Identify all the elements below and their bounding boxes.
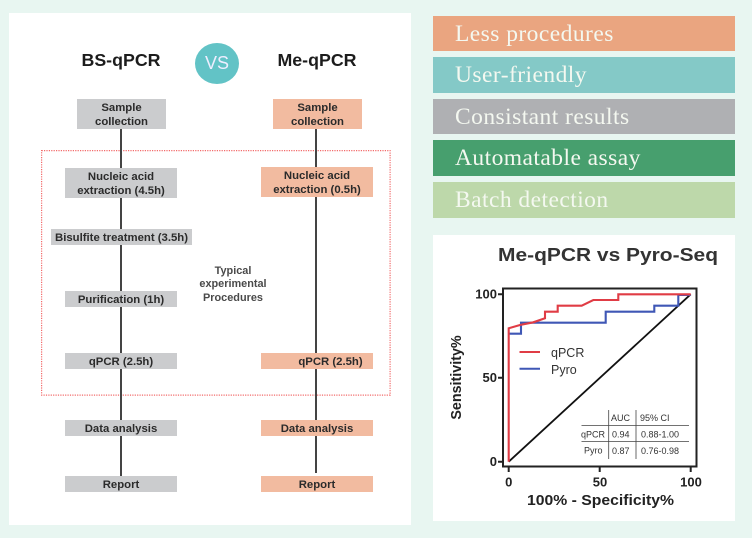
x axis tick labels bbox=[505, 474, 702, 490]
label: typical experimental procedures: experimental bbox=[199, 278, 267, 290]
benefit bar: user-friendly: User-friendly bbox=[455, 62, 587, 88]
AUC table: 95% CI bbox=[640, 413, 670, 423]
step: BS nucleic acid extraction: Nucleic acid bbox=[88, 171, 154, 183]
step: Me nucleic acid extraction: extraction (0.5h) bbox=[273, 184, 361, 196]
diagonal reference line bbox=[509, 294, 691, 462]
step: Me data analysis: Data analysis bbox=[281, 423, 353, 435]
Pyro curve bbox=[509, 295, 691, 334]
AUC table: 0.88-1.00 bbox=[641, 430, 679, 440]
panel: ROC chart bbox=[433, 235, 735, 521]
legend: qPCR bbox=[551, 346, 584, 360]
step: Me sample collection: Sample bbox=[297, 102, 338, 114]
step: Me report: Report bbox=[299, 479, 335, 491]
dotted frame: typical experimental procedures bbox=[41, 150, 391, 396]
step: Me nucleic acid extraction: Nucleic acid bbox=[284, 170, 350, 182]
step: BS nucleic acid extraction: extraction (4.5h) bbox=[77, 184, 165, 196]
icon: VS circle: VS bbox=[205, 53, 229, 73]
step: Me sample collection: collection bbox=[291, 116, 344, 128]
connector: BS-qPCR line bbox=[120, 128, 122, 476]
step: BS sample collection: collection bbox=[95, 116, 148, 128]
step: BS nucleic acid extraction bbox=[65, 168, 177, 198]
heading: BS-qPCR: BS-qPCR bbox=[81, 50, 161, 70]
benefit bar: consistant results bbox=[433, 98, 735, 134]
AUC table: 0.76-0.98 bbox=[641, 446, 679, 456]
AUC table bbox=[581, 410, 689, 459]
step: BS sample collection bbox=[77, 99, 166, 129]
x axis tick labels: 50 bbox=[593, 474, 607, 490]
y axis tick labels: 0 bbox=[490, 454, 497, 469]
step: BS report bbox=[65, 476, 177, 492]
step: Me qPCR: qPCR (2.5h) bbox=[298, 356, 363, 368]
AUC table: qPCR bbox=[581, 430, 606, 440]
icon: VS circle bbox=[195, 43, 239, 84]
qPCR curve bbox=[509, 294, 691, 462]
step: Me report bbox=[261, 476, 373, 492]
AUC table: AUC bbox=[611, 413, 631, 423]
AUC table: 0.94 bbox=[612, 430, 630, 440]
benefit bar: batch detection bbox=[433, 182, 735, 218]
label: typical experimental procedures bbox=[199, 264, 267, 304]
y axis tick labels: 50 bbox=[483, 370, 497, 385]
legend: Pyro bbox=[551, 363, 577, 377]
step: Me qPCR bbox=[261, 353, 373, 369]
heading: Me-qPCR: Me-qPCR bbox=[277, 50, 357, 70]
step: Me nucleic acid extraction bbox=[261, 167, 373, 197]
y axis tick labels bbox=[475, 286, 497, 469]
step: bisulfite treatment: Bisulfite treatment (3.5h) bbox=[55, 232, 188, 244]
benefit bar: automatable assay: Automatable assay bbox=[455, 145, 641, 171]
benefit bar: batch detection: Batch detection bbox=[455, 187, 609, 213]
chart title: Me-qPCR vs Pyro-Seq bbox=[498, 244, 718, 265]
step: BS data analysis: Data analysis bbox=[85, 423, 157, 435]
benefit bar: less procedures bbox=[433, 16, 735, 51]
plot frame and ticks bbox=[498, 288, 696, 472]
AUC table: Pyro bbox=[584, 446, 603, 456]
panel: workflow comparison bbox=[9, 13, 411, 525]
legend bbox=[520, 346, 584, 377]
step: purification: Purification (1h) bbox=[78, 294, 164, 306]
step: purification bbox=[65, 291, 177, 307]
step: BS qPCR: qPCR (2.5h) bbox=[89, 356, 153, 368]
label: typical experimental procedures: Typical bbox=[215, 264, 251, 276]
y axis tick labels: 100 bbox=[475, 286, 497, 302]
x axis tick labels: 0 bbox=[505, 474, 512, 490]
label: typical experimental procedures: Procedures bbox=[203, 292, 263, 304]
step: BS qPCR bbox=[65, 353, 177, 369]
benefit bar: less procedures: Less procedures bbox=[455, 20, 614, 46]
step: BS report: Report bbox=[103, 479, 139, 491]
step: BS data analysis bbox=[65, 420, 177, 436]
connector: Me-qPCR line bbox=[315, 128, 317, 473]
y axis title: Sensitivity% bbox=[449, 335, 465, 420]
step: Me sample collection bbox=[273, 99, 362, 129]
step: Me data analysis bbox=[261, 420, 373, 436]
x axis title: 100% - Specificity% bbox=[527, 492, 674, 509]
benefit bar: user-friendly bbox=[433, 57, 735, 92]
AUC table: 0.87 bbox=[612, 446, 630, 456]
x axis tick labels: 100 bbox=[680, 474, 702, 490]
benefit bar: consistant results: Consistant results bbox=[455, 104, 630, 130]
step: BS sample collection: Sample bbox=[101, 102, 142, 114]
benefit bar: automatable assay bbox=[433, 140, 735, 176]
